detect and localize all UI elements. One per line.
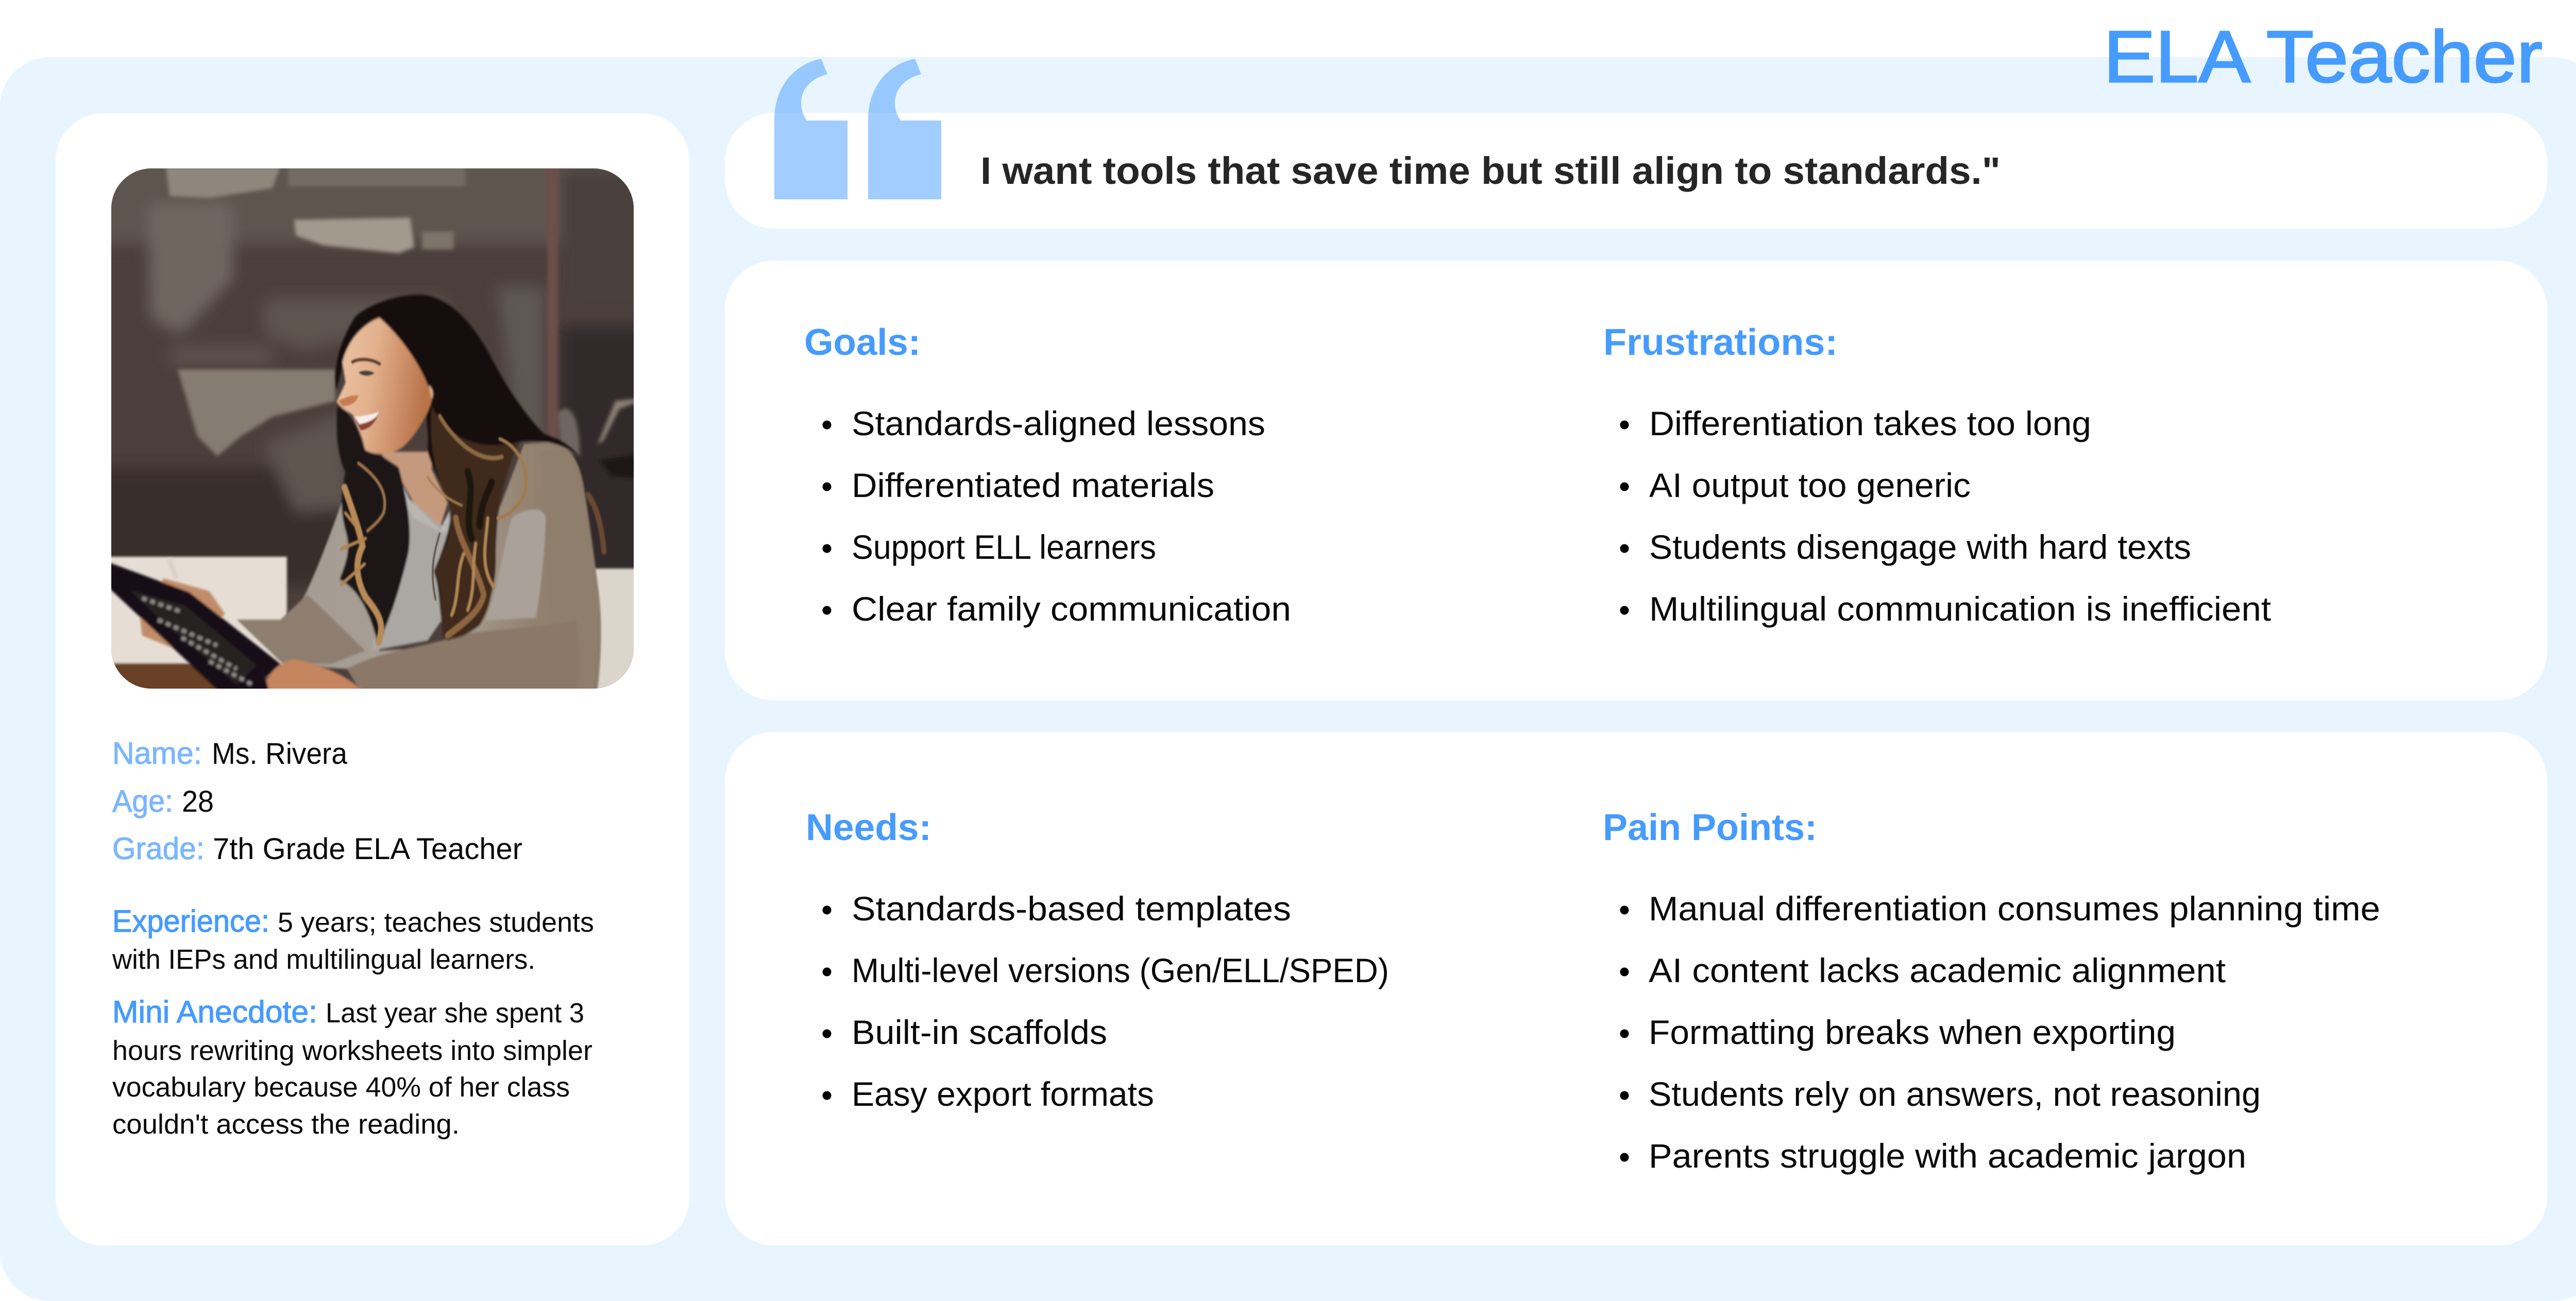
mini anecdote text: Last year she spent 3 — [326, 998, 584, 1029]
frustrations list — [1620, 404, 2271, 628]
hands and tablet — [99, 558, 369, 697]
goals list: Standards-aligned lessons — [852, 404, 1265, 442]
mini anecdote text — [112, 995, 592, 1140]
mini anecdote text: hours rewriting worksheets into simpler — [112, 1035, 592, 1066]
ear — [429, 385, 433, 401]
sweater — [237, 441, 601, 702]
experience text — [112, 904, 594, 975]
profile facts: name, age and grade: 28 — [182, 785, 214, 818]
chairs and table — [91, 557, 287, 675]
left lock — [337, 406, 410, 643]
quote text: I want tools that save time but still align to standards." — [980, 149, 2001, 192]
profile facts: name, age and grade: Name: — [112, 736, 202, 771]
goals list: Differentiated materials — [852, 466, 1214, 504]
needs list: Standards-based templates — [852, 889, 1291, 928]
frustrations list: Students disengage with hard texts — [1649, 528, 2191, 566]
pain points list: Students rely on answers, not reasoning — [1649, 1075, 2261, 1113]
grey inner shirt — [371, 498, 452, 651]
icon: quotation marks — [774, 59, 941, 199]
panel: needs and pain points — [725, 732, 2547, 1245]
right lock mid brown — [431, 406, 520, 639]
needs list: Built-in scaffolds — [852, 1013, 1107, 1051]
frustrations list: AI output too generic — [1649, 466, 1971, 504]
goals list: Clear family communication — [852, 590, 1291, 628]
frustrations heading: Frustrations: — [1603, 322, 1838, 363]
title: ELA Teacher — [2104, 16, 2543, 98]
experience text: with IEPs and multilingual learners. — [112, 944, 535, 975]
needs list — [822, 889, 1389, 1113]
experience text: 5 years; teaches students — [278, 907, 594, 938]
back hair — [335, 295, 579, 641]
profile facts: name, age and grade: Age: — [112, 784, 173, 818]
pain points list: Parents struggle with academic jargon — [1649, 1137, 2246, 1175]
face — [336, 318, 432, 454]
facial details — [338, 360, 381, 430]
needs list: Easy export formats — [852, 1075, 1154, 1113]
needs heading: Needs: — [806, 807, 931, 848]
panel: quote — [725, 59, 2547, 229]
pain points list — [1620, 889, 2380, 1175]
panel: goals and frustrations — [725, 261, 2547, 700]
pain points heading: Pain Points: — [1603, 807, 1817, 848]
experience text: Experience: — [112, 904, 269, 938]
pain points list: Manual differentiation consumes planning time — [1649, 889, 2380, 928]
neck — [380, 452, 448, 526]
profile facts: name, age and grade: 7th Grade ELA Teacher — [213, 832, 522, 866]
pain points list: Formatting breaks when exporting — [1649, 1013, 2176, 1051]
pain points list: AI content lacks academic alignment — [1649, 951, 2226, 989]
panel: profile card — [56, 113, 689, 1245]
mini anecdote text: vocabulary because 40% of her class — [112, 1072, 570, 1103]
needs list: Multi-level versions (Gen/ELL/SPED) — [852, 951, 1389, 989]
person drawn in crop coordinates — [237, 295, 604, 702]
frustrations list: Differentiation takes too long — [1649, 404, 2091, 442]
profile facts: name, age and grade: Grade: — [112, 831, 205, 866]
mini anecdote text: couldn't access the reading. — [112, 1109, 460, 1140]
goals list — [822, 404, 1291, 628]
hair strands — [342, 416, 604, 642]
frustrations list: Multilingual communication is inefficient — [1649, 590, 2271, 628]
mini anecdote text: Mini Anecdote: — [112, 995, 317, 1029]
photo: smiling teacher holding a tablet — [111, 168, 634, 689]
goals heading: Goals: — [804, 322, 921, 363]
profile facts: name, age and grade: Ms. Rivera — [212, 737, 348, 771]
goals list: Support ELL learners — [852, 528, 1156, 566]
profile facts: name, age and grade — [112, 736, 522, 866]
